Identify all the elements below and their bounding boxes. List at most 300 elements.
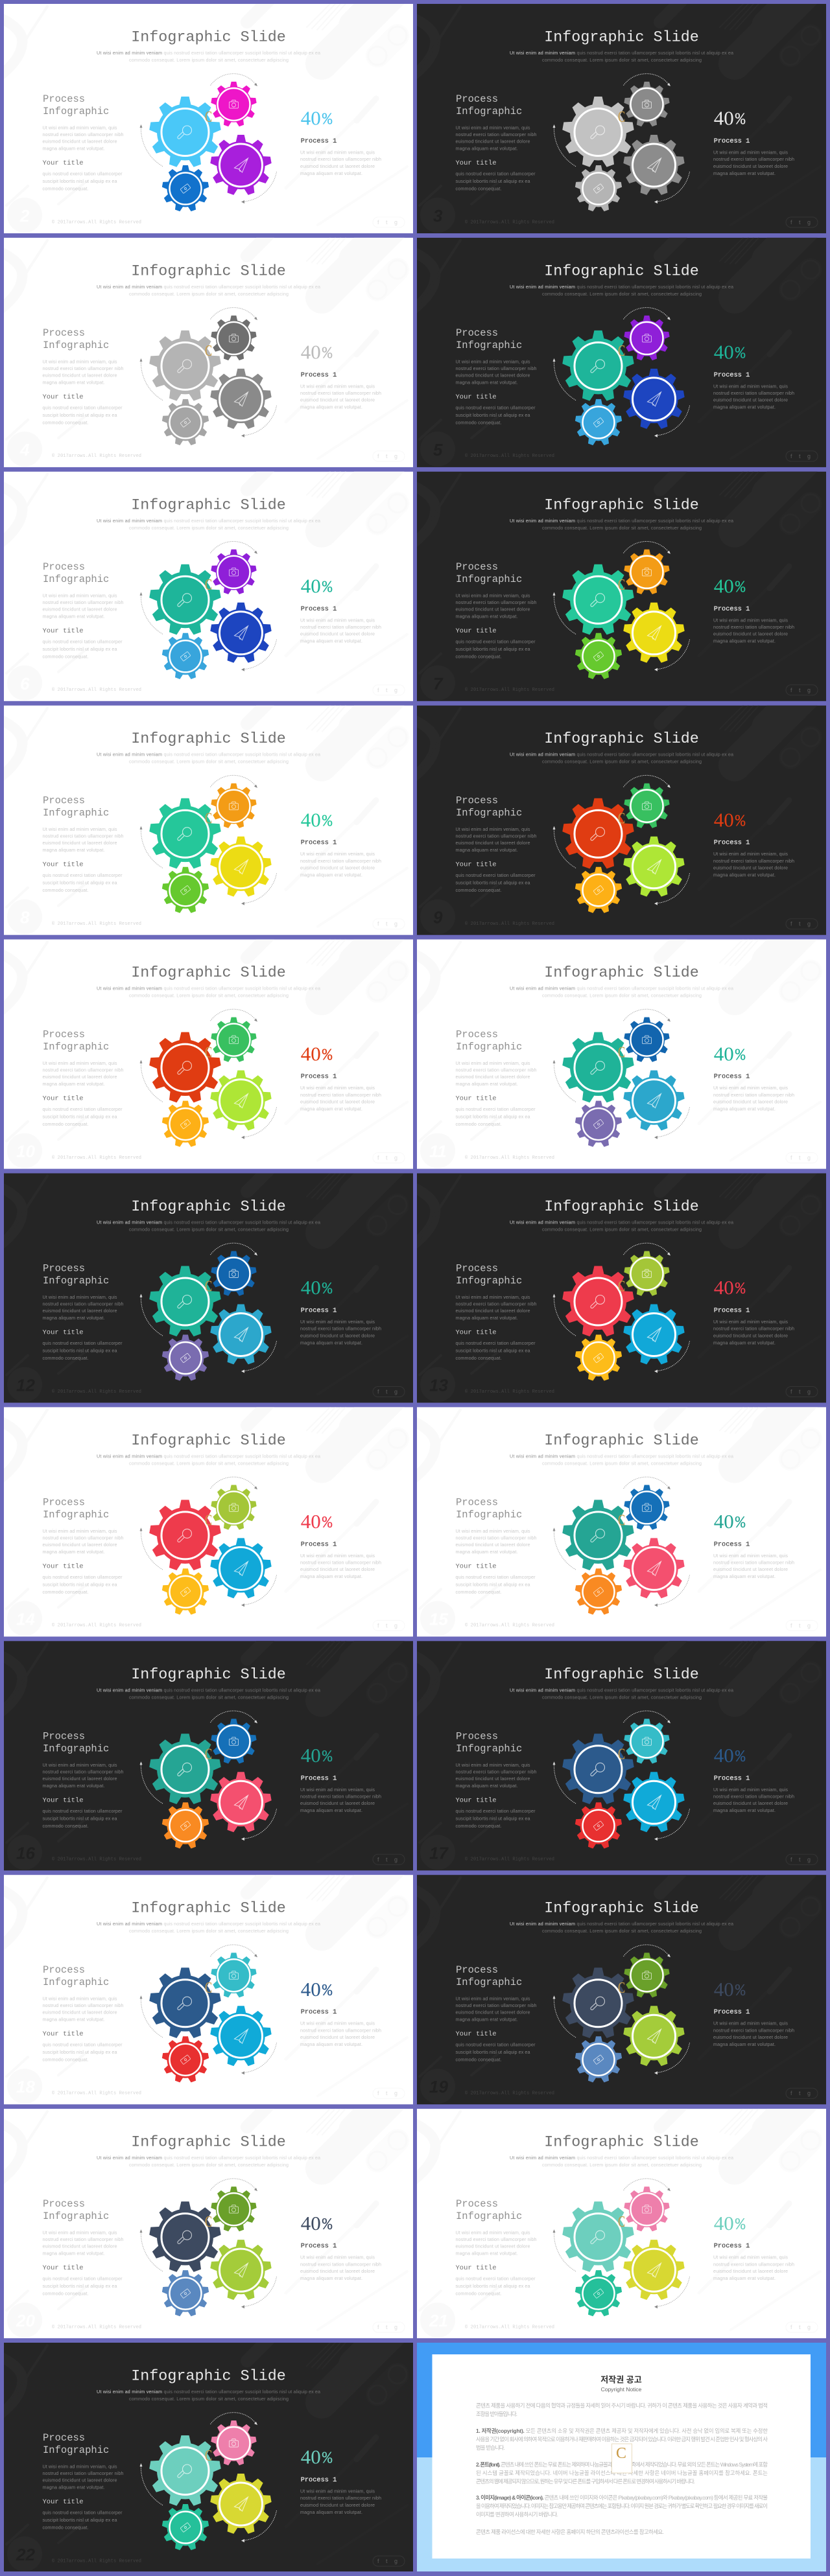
right text block: magna aliquam erat volutpat. (713, 638, 776, 644)
left text block: magna aliquam erat volutpat. (455, 1549, 517, 1555)
social icons: t (799, 1622, 801, 1629)
right text block: euismod tincidunt ut laoreet dolore (713, 163, 788, 169)
social icons: f (790, 2324, 792, 2330)
footer copyright: © 2017arrows.All Rights Reserved (465, 1857, 554, 1862)
social icons: t (799, 2090, 801, 2096)
left text block: magna aliquam erat volutpat. (455, 847, 517, 853)
left text block: nostrud exerci tation ullamcorper nibh (43, 599, 123, 605)
heading: Infographic (43, 1041, 109, 1053)
slide 21: dark, mint pink yellow teal (1, 2325, 413, 2571)
subtitle: Ut wisi enim ad minim veniam (97, 2389, 162, 2395)
left text block: Ut wisi enim ad minim veniam, quis (455, 1294, 530, 1300)
social icons: f (790, 921, 792, 927)
right text block: euismod tincidunt ut laoreet dolore (300, 397, 375, 403)
social icons: f (377, 1388, 379, 1395)
left text block 2: suscipit lobortis nisl ut aliquip ex ea (43, 2517, 117, 2523)
subtitle: commodo consequat. Lorem ipsum dolor sit amet, consectetuer adipiscing (542, 2162, 702, 2168)
social icons (373, 685, 405, 695)
slide 8: dark, red green lime amber (414, 688, 826, 935)
right text block: magna aliquam erat volutpat. (300, 404, 362, 410)
left text block 2: suscipit lobortis nisl ut aliquip ex ea (455, 1815, 530, 1821)
stat: 40 (301, 1744, 321, 1767)
left text block: euismod tincidunt ut laoreet dolore (43, 840, 117, 846)
left text block: nostrud exerci tation ullamcorper nibh (455, 599, 537, 605)
heading: Process (43, 1964, 85, 1976)
title: Infographic Slide (131, 2135, 286, 2152)
gear cluster: C (618, 1980, 625, 1997)
slide 19: light, slate olive lime steel: 20 (16, 2311, 35, 2330)
gear cluster: C (618, 811, 625, 827)
heading: Process (43, 1262, 85, 1274)
left text block: euismod tincidunt ut laoreet dolore (455, 1074, 530, 1080)
right text block: magna aliquam erat volutpat. (713, 2041, 776, 2047)
social icons (786, 2322, 818, 2332)
slide 9: light, red green lime amber (1, 922, 413, 1169)
slide 4: dark, teal purple blue cyan: 5 (433, 440, 443, 459)
social icons: t (799, 453, 801, 459)
title: Infographic Slide (544, 1433, 699, 1450)
left text block: nostrud exerci tation ullamcorper nibh (43, 1535, 123, 1540)
subtitle: quis nostrud exerci tation ullamcorper suscipit lobortis nisl ut aliquip ex ea (163, 1687, 320, 1693)
your title: Your title (43, 627, 84, 635)
stat: % (735, 1747, 746, 1767)
left text block 2: suscipit lobortis nisl ut aliquip ex ea (455, 412, 530, 418)
left text block: euismod tincidunt ut laoreet dolore (455, 2010, 530, 2015)
social icons: t (386, 2324, 388, 2330)
social icons: f (790, 2090, 792, 2096)
left text block 2: quis nostrud exerci tation ullamcorper (455, 638, 536, 644)
right text block: Ut wisi enim ad minim veniam, quis (713, 2255, 788, 2260)
left text block 2: suscipit lobortis nisl ut aliquip ex ea (43, 1114, 117, 1120)
left text block: magna aliquam erat volutpat. (455, 2017, 517, 2023)
social icons: t (799, 687, 801, 693)
heading: Process (43, 327, 85, 339)
subtitle: quis nostrud exerci tation ullamcorper suscipit lobortis nisl ut aliquip ex ea (577, 752, 733, 758)
slide 6: dark, green orange yellow lime (414, 454, 826, 701)
notice text: 을 이용하여 제작되었습니다. 이미지는 참고용만 제공하며 콘텐츠에는 포함됩니다. 이미지 원본 경로는 귀하가 별도로 확인하고 필요한 경우 이미지를 새로이 (476, 2503, 768, 2509)
subtitle: quis nostrud exerci tation ullamcorper suscipit lobortis nisl ut aliquip ex ea (577, 1687, 733, 1693)
right text block: Ut wisi enim ad minim veniam, quis (713, 1787, 788, 1793)
notice text: 2. 폰트(font). 콘텐츠 내에 쓰인 폰트는 무료 폰트는 제외하며 나눔글꼴과 배달의 민족에서 제작되었습니다. 무료 외의 모든 폰트는 Windows System에 포함 (476, 2461, 768, 2468)
left text block 2: quis nostrud exerci tation ullamcorper (43, 1808, 123, 1814)
social icons: f (790, 453, 792, 459)
gear cluster (140, 2179, 276, 2317)
subtitle: Ut wisi enim ad minim veniam (97, 1921, 162, 1927)
process label: Process 1 (301, 2476, 337, 2484)
left text block: magna aliquam erat volutpat. (43, 2485, 105, 2490)
heading: Process (43, 2432, 85, 2444)
stat: 40 (714, 808, 734, 831)
social icons: g (394, 2090, 397, 2096)
gear cluster: C (205, 1980, 212, 1997)
title: Infographic Slide (131, 30, 286, 47)
left text block 2: commodo consequat. (43, 2057, 88, 2063)
right text block: nostrud exerci tation ullamcorper nibh (713, 1092, 794, 1098)
social icons (373, 2088, 405, 2098)
left text block: euismod tincidunt ut laoreet dolore (455, 2244, 530, 2249)
subtitle: quis nostrud exerci tation ullamcorper suscipit lobortis nisl ut aliquip ex ea (163, 1453, 320, 1459)
left text block: magna aliquam erat volutpat. (43, 2017, 105, 2023)
title: Infographic Slide (544, 1901, 699, 1918)
subtitle: quis nostrud exerci tation ullamcorper suscipit lobortis nisl ut aliquip ex ea (577, 986, 733, 992)
right text block: Ut wisi enim ad minim veniam, quis (713, 1085, 788, 1091)
right text block: euismod tincidunt ut laoreet dolore (300, 2502, 375, 2508)
gear cluster: C (618, 343, 625, 360)
heading: Infographic (43, 807, 109, 819)
process label: Process 1 (301, 1073, 337, 1081)
subtitle: Ut wisi enim ad minim veniam (510, 986, 575, 992)
subtitle: commodo consequat. Lorem ipsum dolor sit amet, consectetuer adipiscing (129, 2162, 289, 2168)
left text block 2: commodo consequat. (455, 2057, 502, 2063)
gear cluster: C (205, 577, 212, 594)
left text block 2: quis nostrud exerci tation ullamcorper (43, 404, 123, 410)
left text block: nostrud exerci tation ullamcorper nibh (455, 366, 537, 371)
social icons: g (807, 453, 811, 459)
stat: 40 (301, 107, 321, 130)
right text block: nostrud exerci tation ullamcorper nibh (300, 2261, 381, 2267)
left text block: magna aliquam erat volutpat. (43, 1549, 105, 1555)
social icons: f (377, 1856, 379, 1862)
stat: % (735, 811, 746, 831)
title: Infographic Slide (131, 1199, 286, 1216)
process label: Process 1 (301, 371, 337, 379)
right text block: magna aliquam erat volutpat. (300, 1106, 362, 1111)
left text block: magna aliquam erat volutpat. (43, 1081, 105, 1087)
notice text (476, 2402, 768, 2535)
social icons: g (807, 2090, 811, 2096)
right text block: Ut wisi enim ad minim veniam, quis (300, 851, 375, 857)
social icons: t (386, 687, 388, 693)
right text block: nostrud exerci tation ullamcorper nibh (300, 1794, 381, 1800)
right text block: nostrud exerci tation ullamcorper nibh (300, 390, 381, 396)
notice text: 3. 이미지(image) & 아이콘(icon). 콘텐츠 내에 쓰인 이미지와 아이콘은 Pixabay(pixabay.com)와 Pixabay(pixabay.com) 등에서 제공된 무료 저작물 (476, 2494, 768, 2501)
right text block: Ut wisi enim ad minim veniam, quis (300, 1553, 375, 1559)
right text block: euismod tincidunt ut laoreet dolore (713, 1566, 788, 1572)
footer copyright: © 2017arrows.All Rights Reserved (465, 687, 554, 693)
social icons: g (394, 219, 397, 226)
left text block: nostrud exerci tation ullamcorper nibh (455, 1301, 537, 1306)
left text block: Ut wisi enim ad minim veniam, quis (43, 1996, 117, 2002)
social icons (786, 1620, 818, 1630)
subtitle: quis nostrud exerci tation ullamcorper suscipit lobortis nisl ut aliquip ex ea (163, 752, 320, 758)
stat: 40 (714, 1510, 734, 1533)
left text block: nostrud exerci tation ullamcorper nibh (43, 1067, 123, 1073)
heading: Infographic (43, 106, 109, 117)
footer copyright: © 2017arrows.All Rights Reserved (465, 453, 554, 459)
left text block 2: suscipit lobortis nisl ut aliquip ex ea (455, 1581, 530, 1587)
gear cluster: C (205, 1279, 212, 1295)
heading: Infographic (456, 340, 522, 351)
left text block 2: commodo consequat. (455, 1823, 502, 1829)
stat: 40 (714, 1042, 734, 1065)
social icons: f (377, 219, 379, 226)
heading: Infographic (456, 1041, 522, 1053)
stat: 40 (301, 1042, 321, 1065)
social icons: g (807, 2324, 811, 2330)
slide 5: light, teal purple blue cyan (1, 454, 413, 701)
slide 19: light, slate olive lime steel (1, 2091, 413, 2338)
social icons: f (377, 2090, 379, 2096)
left text block 2: suscipit lobortis nisl ut aliquip ex ea (455, 178, 530, 184)
heading: Infographic (43, 1743, 109, 1754)
slide 9: light, red green lime amber: 10 (16, 1142, 35, 1161)
left text block: magna aliquam erat volutpat. (43, 1783, 105, 1789)
social icons (786, 919, 818, 929)
left text block: magna aliquam erat volutpat. (455, 1783, 517, 1789)
right text block: nostrud exerci tation ullamcorper nibh (300, 858, 381, 864)
social icons (373, 1153, 405, 1163)
subtitle: Ut wisi enim ad minim veniam (510, 1687, 575, 1693)
slide 17: light, navy teal cyan red: 18 (16, 2077, 35, 2096)
subtitle: commodo consequat. Lorem ipsum dolor sit amet, consectetuer adipiscing (542, 993, 702, 999)
slide 6: dark, green orange yellow lime: 7 (433, 674, 444, 693)
stat: % (322, 1747, 333, 1767)
slide 4: dark, teal purple blue cyan (414, 220, 826, 467)
heading: Infographic (43, 1275, 109, 1287)
left text block 2: commodo consequat. (43, 1589, 88, 1595)
left text block: Ut wisi enim ad minim veniam, quis (455, 826, 530, 832)
heading: Infographic (456, 1743, 522, 1754)
process label: Process 1 (714, 371, 750, 379)
social icons (786, 685, 818, 695)
social icons: t (386, 1155, 388, 1161)
footer copyright: © 2017arrows.All Rights Reserved (465, 1389, 554, 1395)
title: Infographic Slide (131, 2368, 286, 2385)
left text block 2: suscipit lobortis nisl ut aliquip ex ea (455, 646, 530, 652)
social icons: g (807, 1388, 811, 1395)
slide 1: light, cyan magenta purple blue (1, 0, 413, 233)
gear cluster (140, 74, 276, 212)
social icons: f (377, 1155, 379, 1161)
right text block: nostrud exerci tation ullamcorper nibh (713, 2027, 794, 2033)
left text block: magna aliquam erat volutpat. (455, 145, 517, 152)
process label: Process 1 (301, 2008, 337, 2016)
gear cluster: C (618, 109, 625, 126)
title: Infographic Slide (544, 2135, 699, 2152)
heading: Process (43, 1029, 85, 1041)
left text block: nostrud exerci tation ullamcorper nibh (43, 1301, 123, 1306)
social icons: f (377, 687, 379, 693)
right text block: nostrud exerci tation ullamcorper nibh (300, 624, 381, 630)
social icons (373, 451, 405, 461)
your title: Your title (43, 1796, 84, 1804)
social icons: t (386, 921, 388, 927)
stat: 40 (714, 1978, 734, 2001)
slide 13: light, red olive cyan yellow: 14 (16, 1609, 35, 1629)
left text block 2: quis nostrud exerci tation ullamcorper (43, 1340, 123, 1346)
social icons: f (790, 687, 792, 693)
left text block: euismod tincidunt ut laoreet dolore (43, 1542, 117, 1548)
gear cluster (140, 1711, 276, 1849)
left text block: nostrud exerci tation ullamcorper nibh (43, 833, 123, 839)
slide 3: light, greys (1, 220, 413, 467)
gear cluster: C (205, 2214, 212, 2231)
gear cluster: C (618, 1513, 625, 1529)
process label: Process 1 (301, 605, 337, 613)
right text block: nostrud exerci tation ullamcorper nibh (713, 858, 794, 864)
slide 18: dark, slate olive lime steel: 19 (429, 2077, 448, 2096)
subtitle: Ut wisi enim ad minim veniam (510, 2155, 575, 2161)
left text block 2: suscipit lobortis nisl ut aliquip ex ea (43, 1581, 117, 1587)
process label: Process 1 (301, 839, 337, 847)
stat: 40 (301, 574, 321, 598)
left text block 2: quis nostrud exerci tation ullamcorper (43, 638, 123, 644)
right text block: magna aliquam erat volutpat. (713, 872, 776, 877)
left text block: Ut wisi enim ad minim veniam, quis (43, 826, 117, 832)
left text block: euismod tincidunt ut laoreet dolore (455, 139, 530, 144)
slide 16: dark, navy teal cyan red: 17 (429, 1843, 449, 1862)
left text block 2: suscipit lobortis nisl ut aliquip ex ea (43, 1815, 117, 1821)
subtitle: Ut wisi enim ad minim veniam (97, 1687, 162, 1693)
heading: Infographic (456, 807, 522, 819)
right text block: Ut wisi enim ad minim veniam, quis (713, 617, 788, 623)
heading: Infographic (456, 574, 522, 585)
heading: Process (43, 795, 85, 807)
left text block: Ut wisi enim ad minim veniam, quis (455, 1528, 530, 1534)
slide 20: light, mint pink yellow teal: 21 (429, 2311, 448, 2330)
social icons (373, 2556, 405, 2566)
subtitle: Ut wisi enim ad minim veniam (97, 986, 162, 992)
social icons (786, 1387, 818, 1397)
right text block: magna aliquam erat volutpat. (713, 1807, 776, 1813)
left text block: magna aliquam erat volutpat. (43, 847, 105, 853)
gear cluster (140, 1477, 276, 1615)
left text block: nostrud exerci tation ullamcorper nibh (455, 2236, 537, 2242)
stat: % (322, 1045, 333, 1065)
social icons: f (377, 2558, 379, 2564)
gear cluster (552, 1009, 690, 1148)
social icons: f (377, 2324, 379, 2330)
your title: Your title (455, 393, 497, 401)
heading: Process (456, 795, 498, 807)
gear cluster: C (205, 109, 212, 126)
social icons: t (799, 1155, 801, 1161)
stat: 40 (301, 1510, 321, 1533)
social icons (373, 1620, 405, 1630)
left text block 2: suscipit lobortis nisl ut aliquip ex ea (455, 1348, 530, 1353)
left text block 2: commodo consequat. (43, 185, 88, 192)
social icons (786, 1854, 818, 1864)
notice text: 콘텐츠 제품 라이선스에 대한 자세한 사항은 홈페이지 하단의 콘텐츠라이선스를 참고하세요. (476, 2529, 664, 2535)
left text block: euismod tincidunt ut laoreet dolore (43, 139, 117, 144)
social icons: g (394, 453, 397, 459)
social icons: t (799, 2324, 801, 2330)
heading: Infographic (43, 340, 109, 351)
stat: 40 (714, 1744, 734, 1767)
left text block 2: suscipit lobortis nisl ut aliquip ex ea (455, 2283, 530, 2289)
right text block: magna aliquam erat volutpat. (300, 1573, 362, 1579)
social icons: g (807, 921, 811, 927)
subtitle: quis nostrud exerci tation ullamcorper suscipit lobortis nisl ut aliquip ex ea (577, 1453, 733, 1459)
stat: 40 (301, 808, 321, 831)
slide 11: dark, teal blue turquoise violet: 12 (16, 1375, 35, 1395)
right text block: nostrud exerci tation ullamcorper nibh (713, 1560, 794, 1566)
right text block: Ut wisi enim ad minim veniam, quis (713, 2021, 788, 2026)
your title: Your title (43, 1329, 84, 1336)
slide 20: light, mint pink yellow teal (414, 2091, 826, 2338)
heading: Infographic (43, 1509, 109, 1520)
your title: Your title (455, 159, 497, 167)
heading: Process (456, 1029, 498, 1041)
footer copyright: © 2017arrows.All Rights Reserved (465, 1623, 554, 1629)
footer copyright: © 2017arrows.All Rights Reserved (465, 1155, 554, 1161)
social icons: t (386, 1622, 388, 1629)
your title: Your title (455, 627, 497, 635)
left text block: nostrud exerci tation ullamcorper nibh (455, 833, 537, 839)
process label: Process 1 (714, 2242, 750, 2250)
left text block 2: commodo consequat. (43, 653, 88, 659)
gear cluster (552, 1243, 690, 1381)
left text block: euismod tincidunt ut laoreet dolore (455, 1542, 530, 1548)
left text block 2: suscipit lobortis nisl ut aliquip ex ea (43, 412, 117, 418)
stat: % (322, 811, 333, 831)
subtitle: quis nostrud exerci tation ullamcorper suscipit lobortis nisl ut aliquip ex ea (163, 518, 320, 524)
process label: Process 1 (714, 1540, 750, 1548)
stat: 40 (301, 1978, 321, 2001)
heading: Infographic (43, 2444, 109, 2456)
right text block: magna aliquam erat volutpat. (713, 2275, 776, 2281)
right text block: Ut wisi enim ad minim veniam, quis (300, 2489, 375, 2494)
heading: Process (456, 561, 498, 573)
right text block: magna aliquam erat volutpat. (713, 1106, 776, 1111)
social icons: f (377, 1622, 379, 1629)
notice text: 콘텐츠의 웹에 제공되지 않으므로, 원하는 유무 및 다른 폰트를 구입하셔서 다른 폰트로 변경하여 사용하시기 바랍니다. (476, 2478, 695, 2485)
right text block: Ut wisi enim ad minim veniam, quis (713, 1553, 788, 1559)
right text block: Ut wisi enim ad minim veniam, quis (300, 617, 375, 623)
right text block: nostrud exerci tation ullamcorper nibh (300, 1560, 381, 1566)
left text block: magna aliquam erat volutpat. (43, 379, 105, 385)
social icons: g (807, 1155, 811, 1161)
left text block 2: suscipit lobortis nisl ut aliquip ex ea (43, 178, 117, 184)
process label: Process 1 (714, 839, 750, 847)
right text block: nostrud exerci tation ullamcorper nibh (713, 156, 794, 162)
subtitle: Ut wisi enim ad minim veniam (97, 50, 162, 56)
slide 11: dark, teal blue turquoise violet (1, 1155, 413, 1402)
footer copyright: © 2017arrows.All Rights Reserved (52, 1623, 141, 1629)
heading: Process (456, 93, 498, 105)
your title: Your title (43, 2030, 84, 2038)
process label: Process 1 (301, 1540, 337, 1548)
footer copyright: © 2017arrows.All Rights Reserved (465, 2090, 554, 2096)
left text block: Ut wisi enim ad minim veniam, quis (43, 358, 117, 364)
footer copyright: © 2017arrows.All Rights Reserved (52, 2324, 141, 2330)
stat: % (735, 344, 746, 364)
subtitle: commodo consequat. Lorem ipsum dolor sit amet, consectetuer adipiscing (542, 759, 702, 765)
left text block: nostrud exerci tation ullamcorper nibh (43, 132, 123, 137)
left text block: magna aliquam erat volutpat. (43, 613, 105, 619)
subtitle: Ut wisi enim ad minim veniam (97, 1453, 162, 1459)
slide 12: dark, red olive cyan yellow: 13 (429, 1375, 448, 1395)
subtitle: quis nostrud exerci tation ullamcorper suscipit lobortis nisl ut aliquip ex ea (577, 284, 733, 290)
your title: Your title (43, 393, 84, 401)
slide 15: dark, teal blue pink orange (1, 1623, 413, 1870)
right text block: nostrud exerci tation ullamcorper nibh (713, 624, 794, 630)
social icons: t (386, 1388, 388, 1395)
right text block: magna aliquam erat volutpat. (300, 2041, 362, 2047)
left text block 2: commodo consequat. (43, 1823, 88, 1829)
left text block 2: quis nostrud exerci tation ullamcorper (43, 2042, 123, 2048)
watermark (612, 2444, 632, 2473)
slide 18: dark, slate olive lime steel (414, 1857, 826, 2104)
process label: Process 1 (301, 137, 337, 145)
subtitle: Ut wisi enim ad minim veniam (97, 752, 162, 758)
subtitle: quis nostrud exerci tation ullamcorper suscipit lobortis nisl ut aliquip ex ea (163, 1220, 320, 1225)
stat: % (322, 1981, 333, 2001)
your title: Your title (455, 1796, 497, 1804)
subtitle: Ut wisi enim ad minim veniam (510, 1921, 575, 1927)
social icons: f (377, 453, 379, 459)
gear cluster: C (618, 577, 625, 594)
